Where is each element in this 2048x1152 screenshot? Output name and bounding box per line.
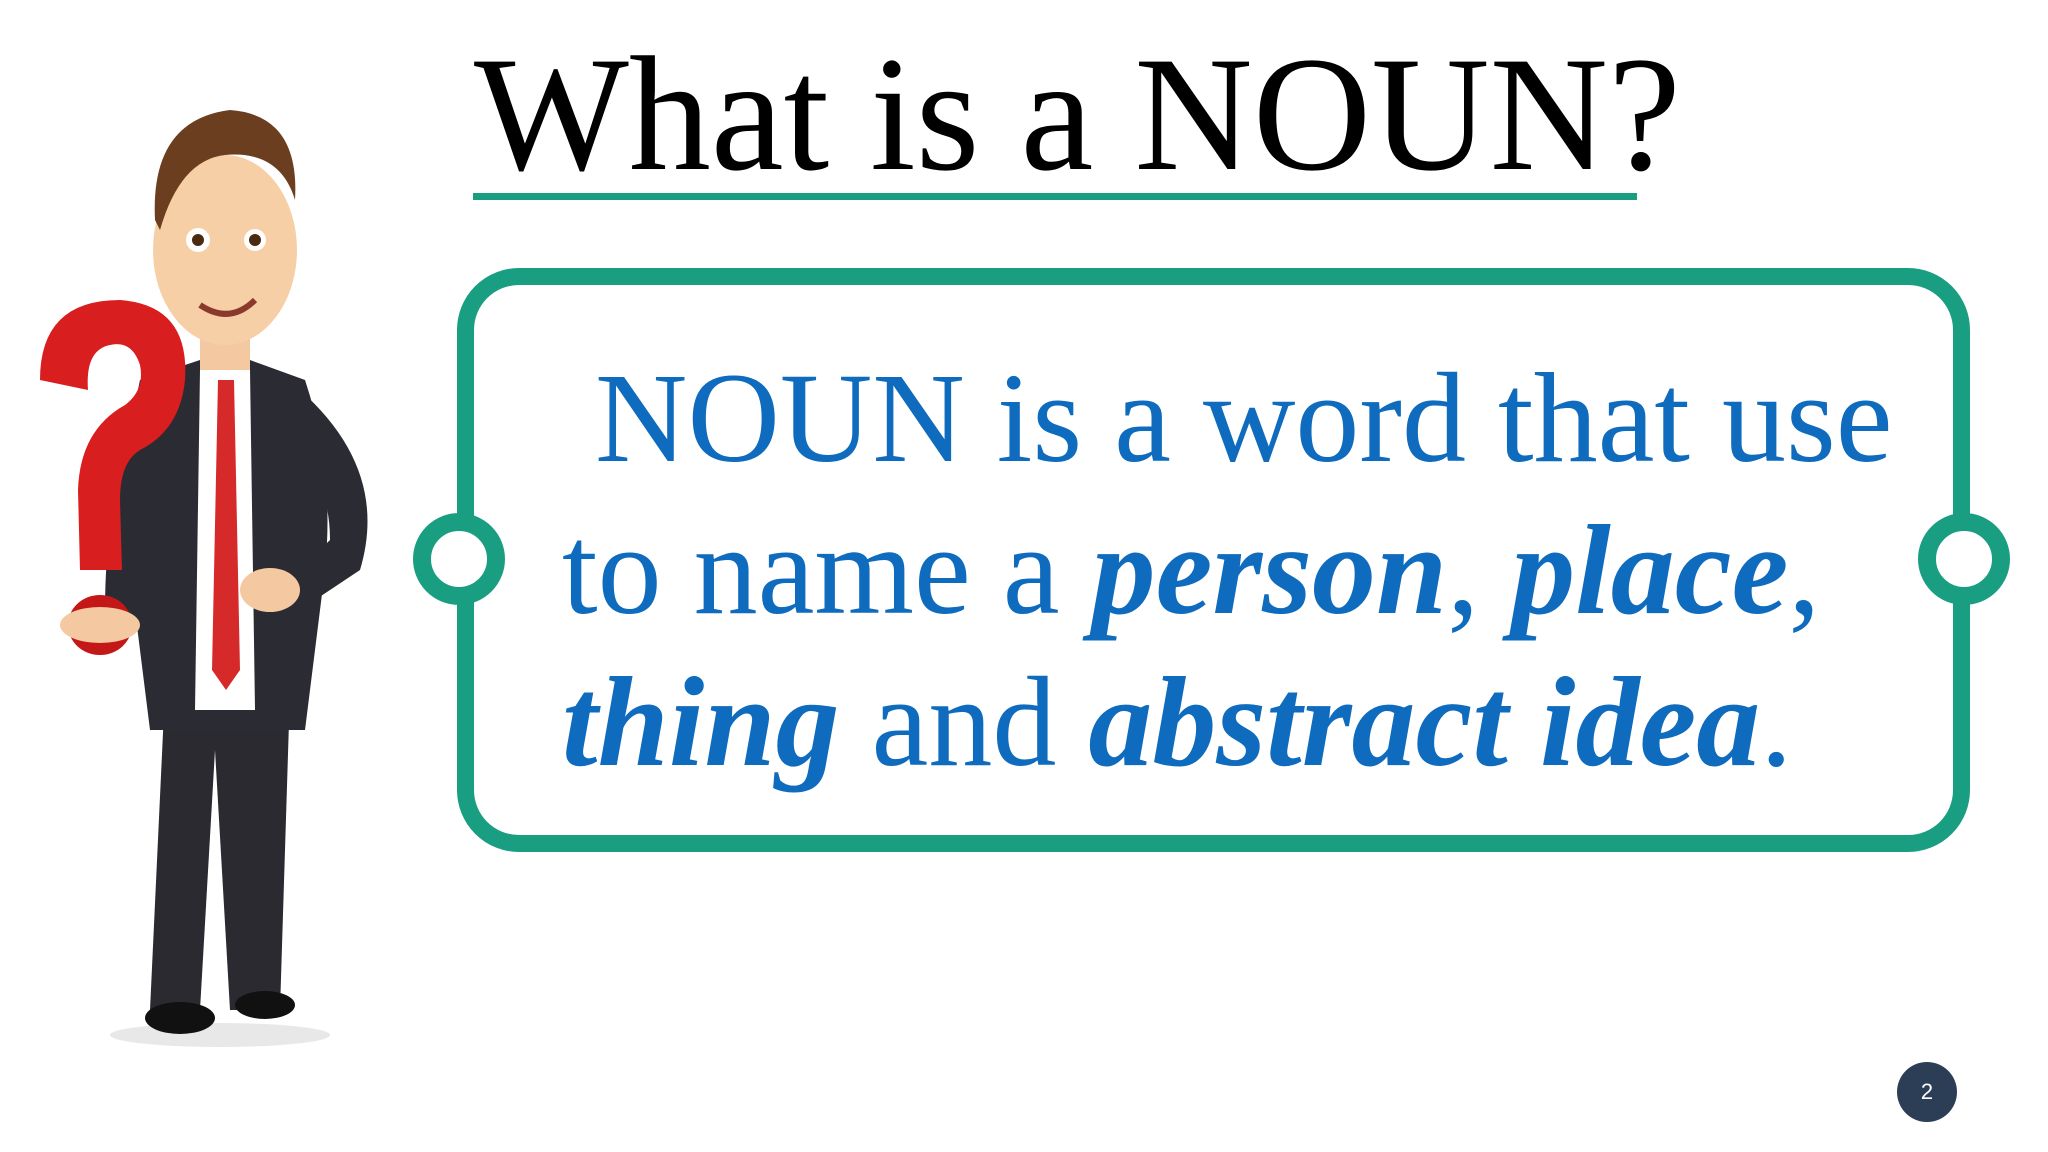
title underline — [473, 193, 1637, 200]
definition text: to name a person, place, — [562, 499, 1820, 641]
page number — [1897, 1062, 1957, 1122]
neck — [200, 320, 250, 370]
tie — [212, 380, 240, 690]
panel border — [457, 268, 1970, 852]
legs — [150, 690, 290, 1010]
left arm — [105, 390, 175, 620]
definition panel — [413, 268, 2010, 852]
page number: 2 — [1921, 1079, 1933, 1104]
title: What is a NOUN? — [474, 24, 1681, 205]
definition text: thing and abstract idea. — [562, 651, 1792, 793]
illustration: businessman with question mark — [40, 110, 368, 1047]
right arm — [290, 390, 368, 610]
head — [153, 155, 297, 345]
question mark — [40, 300, 185, 570]
definition text: NOUN is a word that use — [595, 347, 1893, 489]
connector circle left — [413, 513, 505, 605]
connector circle right — [1918, 513, 2010, 605]
shadow — [110, 1023, 330, 1047]
shoes — [145, 1002, 215, 1034]
definition text — [562, 347, 1893, 793]
jacket — [127, 360, 328, 730]
shirt — [195, 370, 255, 710]
